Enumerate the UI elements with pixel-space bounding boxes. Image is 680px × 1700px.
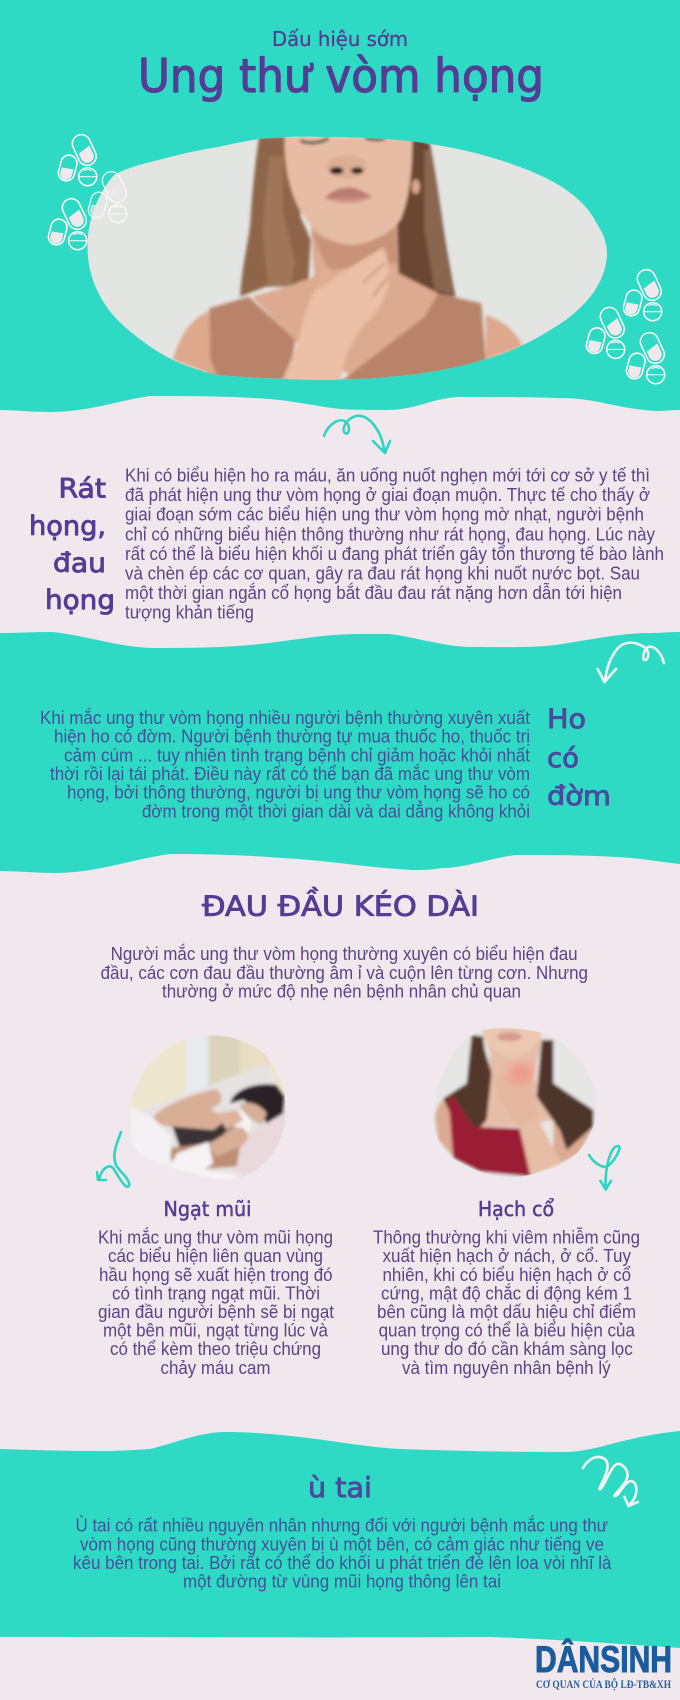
heading: Rát họng, đau họng: Rát xyxy=(58,474,106,505)
arrow: teal curl right xyxy=(589,1146,619,1190)
icon: pills lower left xyxy=(47,196,89,250)
text: blocked nose paragraph: có tình trạng ngạt mũi. Thời xyxy=(112,1283,320,1303)
text: tinnitus paragraph: một đường từ vùng mũi họng thông lên tai xyxy=(183,1572,501,1592)
text: sore throat paragraph: chỉ có những biểu hiện thông thường như rát họng, đau họng. Lúc này xyxy=(125,524,655,544)
teal middle band xyxy=(0,632,680,873)
text: blocked nose paragraph: hầu họng sẽ xuất hiện trong đó xyxy=(99,1265,333,1285)
heading: Ho có đờm xyxy=(547,704,611,812)
text: blocked nose paragraph: có thể kèm theo triệu chứng xyxy=(110,1339,321,1359)
text: headache paragraph: đầu, các cơn đau đầu thường âm ỉ và cuộn lên từng cơn. Nhưng xyxy=(101,963,588,983)
text: sore throat paragraph: Khi có biểu hiện ho ra máu, ăn uống nuốt nghẹn mới tới cơ sở y tế thì xyxy=(125,466,650,486)
heading: Rát họng, đau họng xyxy=(29,474,115,616)
text: cough with phlegm paragraph: thời rồi lại tái phát. Điều này rất có thể bạn đã mắc ung thư vòm xyxy=(50,763,530,784)
photo: woman with blocked nose in bed xyxy=(129,1036,286,1180)
text: headache paragraph xyxy=(101,943,588,1002)
text: blocked nose paragraph: chảy máu cam xyxy=(160,1358,270,1378)
text: sore throat paragraph: và chèn ép các cơ quan, gây ra đau rát họng khi nuốt nước bọt. Sau xyxy=(125,563,640,583)
text: neck lymph node paragraph: bên cũng là một dấu hiệu chỉ điểm xyxy=(377,1302,636,1322)
text: headache paragraph: thường ở mức độ nhẹ nên bệnh nhân chủ quan xyxy=(162,982,521,1002)
text: tinnitus paragraph xyxy=(73,1515,612,1592)
icon: pills overlapping photo xyxy=(87,169,129,223)
arrow: teal curl left xyxy=(97,1132,129,1187)
hero photo: woman holding her throat xyxy=(88,136,607,380)
text: cough with phlegm paragraph: Khi mắc ung thư vòm họng nhiều người bệnh thường xuyên xuất xyxy=(40,707,530,728)
heading: Ù tai: ù tai xyxy=(308,1471,372,1504)
text: tinnitus paragraph: vòm họng cũng thường xuyên bị ù một bên, có cảm giác như tiếng ve xyxy=(80,1534,604,1554)
text: cough with phlegm paragraph: đờm trong một thời gian dài và dai dẳng không khỏi xyxy=(142,800,530,821)
text: neck lymph node paragraph: và tìm nguyên nhân bệnh lý xyxy=(402,1358,611,1378)
icon: pills right top xyxy=(622,267,664,321)
text: cough with phlegm paragraph: cảm cúm ... tuy nhiên tình trạng bệnh chỉ giảm hoặc khỏi nhất xyxy=(64,745,530,765)
text: neck lymph node paragraph: ung thư do đó cần khám sàng lọc xyxy=(381,1339,633,1359)
text: blocked nose paragraph xyxy=(98,1227,334,1378)
text: cough with phlegm paragraph: họng, bởi thông thường, người bị ung thư vòm họng sẽ ho có xyxy=(67,783,530,803)
icon: pills right middle xyxy=(585,304,627,358)
text: cough with phlegm paragraph xyxy=(40,707,530,821)
photo: woman with sore neck in red top xyxy=(433,1028,596,1178)
text: sore throat paragraph: đã phát hiện ung thư vòm họng ở giai đoạn muộn. Thực tế cho thấy ở xyxy=(125,485,650,505)
arrow: white curl in second section xyxy=(598,643,664,682)
heading: Ho có đờm: đờm xyxy=(547,781,611,812)
text: blocked nose paragraph: gian đầu người bệnh sẽ bị ngạt xyxy=(98,1302,334,1322)
arrow: teal curl to first section xyxy=(324,416,390,453)
heading: Ho có đờm: Ho xyxy=(547,704,586,735)
text: neck lymph node paragraph xyxy=(373,1227,640,1378)
text: cough with phlegm paragraph: hiện ho có đờm. Người bệnh thường tự mua thuốc ho, thuốc trị xyxy=(54,727,530,747)
text: neck lymph node paragraph: xuất hiện hạch ở nách, ở cổ. Tuy xyxy=(382,1246,631,1266)
text: tinnitus paragraph: Ù tai có rất nhiều nguyên nhân nhưng đối với người bệnh mắc ung thư xyxy=(76,1515,608,1536)
heading: Ho có đờm: có xyxy=(547,743,579,774)
title: Ung thư vòm họng xyxy=(138,49,544,103)
text: neck lymph node paragraph: cứng, mật độ chắc di động kém 1 xyxy=(381,1282,632,1303)
heading: Đau đầu kéo dài: ĐAU ĐẦU KÉO DÀI xyxy=(202,886,479,922)
text: blocked nose paragraph: Khi mắc ung thư vòm mũi họng xyxy=(98,1227,333,1248)
subtitle: Dấu hiệu sớm xyxy=(272,27,408,51)
text: sore throat paragraph: tượng khản tiếng xyxy=(125,602,254,622)
text: sore throat paragraph: giai đoạn sớm các biểu hiện ung thư vòm họng mờ nhạt, người bệnh xyxy=(125,505,644,525)
teal bottom band xyxy=(0,1431,680,1648)
heading: Rát họng, đau họng: họng, xyxy=(29,511,106,542)
text: sore throat paragraph xyxy=(125,466,664,622)
heading: Rát họng, đau họng: đau xyxy=(53,548,106,579)
text: blocked nose paragraph: các biểu hiện liên quan vùng xyxy=(108,1246,323,1266)
heading: Hạch cổ: Hạch cổ xyxy=(478,1197,554,1221)
teal header band xyxy=(0,0,680,412)
icon: pills top left xyxy=(57,132,99,186)
heading: Ngạt mũi: Ngạt mũi xyxy=(164,1197,252,1221)
text: sore throat paragraph: một thời gian ngắn cổ họng bắt đầu đau rát nặng hơn dẫn tới hiện xyxy=(125,582,622,603)
text: headache paragraph: Người mắc ung thư vòm họng thường xuyên có biểu hiện đau xyxy=(111,943,578,964)
text: blocked nose paragraph: một bên mũi, ngạt từng lúc và xyxy=(103,1321,329,1341)
text: neck lymph node paragraph: Thông thường khi viêm nhiễm cũng xyxy=(373,1227,640,1248)
text: tinnitus paragraph: kêu bên trong tai. Bởi rất có thể do khối u phát triển đè lên loa vòi nhĩ là xyxy=(73,1553,612,1573)
icon: pills right bottom xyxy=(625,330,667,384)
arrow: white squiggle in last section xyxy=(583,1457,638,1506)
text: neck lymph node paragraph: nhiên, khi có biểu hiện hạch ở cổ xyxy=(382,1265,631,1285)
text: neck lymph node paragraph: quan trọng có thể là biểu hiện của xyxy=(379,1321,636,1341)
heading: Rát họng, đau họng: họng xyxy=(45,585,115,616)
